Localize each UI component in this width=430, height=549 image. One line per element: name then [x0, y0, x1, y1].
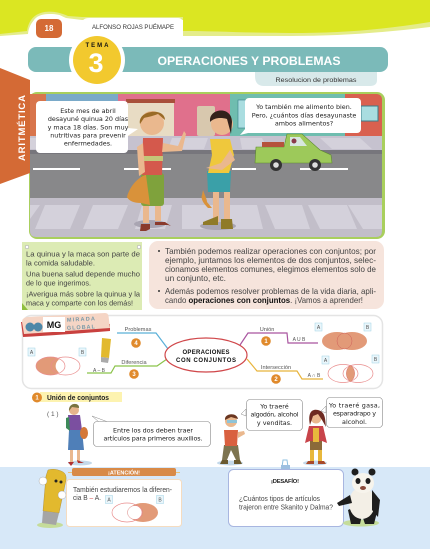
atención banner: ¡ATENCIÓN! [108, 468, 140, 476]
note: healthy food: la comida saludable. [26, 258, 95, 268]
venn: b minus a [106, 496, 164, 522]
pencil mascot small [101, 338, 111, 363]
branch: diferencia: Diferencia [121, 360, 147, 366]
speech bubble: first boy: y maca 18 días. Son muy [48, 124, 129, 132]
title bar: OPERACIONES Y PROBLEMAS [158, 54, 340, 68]
venn: union: B [366, 325, 370, 331]
venn: intersection [322, 355, 379, 382]
panda mascot [337, 468, 380, 526]
venn: b minus a: A [107, 498, 111, 504]
note: healthy food: La quinua y la maca son parte de [26, 250, 140, 258]
speech bubble: first boy: enfermedades. [64, 140, 112, 148]
branch: problemas: Problemas [125, 327, 152, 333]
side tab: aritmética [0, 68, 30, 184]
mirada global label: MIRADA [67, 316, 95, 324]
speech bubble: second boy: ambos alimentos? [275, 120, 333, 128]
speech bubble: girl: esparadrapo y [333, 410, 376, 418]
page number tab [32, 14, 66, 40]
venn: intersection: A [324, 358, 328, 364]
venn: difference: A [30, 350, 34, 356]
panel: mirada global concept map [21, 313, 382, 388]
speech bubble: woman: Entre los dos deben traer [113, 426, 193, 434]
branch: unión: 1 [264, 339, 268, 345]
tema badge: 3 [88, 48, 104, 78]
speech bubble: woman [92, 416, 210, 446]
speech bubble: boy: Yo traeré [259, 402, 289, 410]
branch: intersección: 2 [274, 377, 278, 383]
branch: intersección [261, 365, 321, 384]
speech bubble: first boy: nutritivas para prevenir [50, 132, 126, 140]
speech bubble: boy: y venditas. [257, 419, 292, 427]
branch: diferencia: 3 [132, 372, 136, 378]
branch: unión: Unión [260, 327, 274, 333]
intro text panel: un conjunto, etc. [165, 273, 226, 283]
branch: diferencia: A – B [93, 368, 106, 374]
branch: unión: A U B [293, 337, 306, 343]
callout: desafío: ¡DESAFÍO! [271, 477, 299, 485]
title bar [28, 47, 388, 72]
venn: difference: B [81, 350, 85, 356]
venn: difference [28, 348, 86, 375]
speech bubble: second boy: Pero, ¿cuántos días desayunaste [252, 112, 356, 120]
callout: atención: cia B – A. [73, 493, 101, 502]
speech bubble: first boy [36, 101, 138, 153]
intro text panel: ejemplo, juntamos los elementos de dos conjuntos, selec- [165, 255, 376, 265]
street scene [29, 92, 385, 239]
branch lines [87, 333, 323, 379]
speech bubble: girl [321, 398, 382, 428]
branch: diferencia [93, 360, 147, 379]
note: healthy food [22, 242, 142, 310]
pencil mascot [37, 469, 66, 528]
callout: atención: También estudiaremos la diferen- [73, 485, 172, 494]
boy in yellow shirt [200, 110, 236, 230]
speech bubble: boy [241, 400, 302, 430]
header green wave [0, 0, 430, 36]
central node [165, 338, 247, 372]
intro text panel: También podemos realizar operaciones con conjuntos; por [165, 246, 376, 256]
section heading: unión de conjuntos [32, 392, 122, 402]
pickup truck [255, 134, 332, 171]
woman character [66, 404, 92, 466]
section heading: unión de conjuntos: Unión de conjuntos [47, 395, 109, 402]
intro text panel: cionamos elementos comunes, elegimos elementos solo de [165, 264, 376, 274]
venn: union [315, 323, 371, 350]
boy skanito [217, 414, 245, 466]
note: healthy food: ¡Averigua más sobre la quinua y la [26, 290, 141, 298]
branch: unión [260, 327, 306, 346]
section heading: unión de conjuntos: 1 [35, 396, 39, 402]
speech bubble: second boy [240, 98, 361, 135]
speech bubble: second boy: Yo también me alimento bien. [255, 103, 352, 111]
branch: intersección: Intersección [261, 365, 291, 371]
subtitle tab [255, 72, 377, 86]
branch: problemas [125, 327, 152, 348]
side tab: aritmética: ARITMÉTICA [17, 95, 28, 161]
author tab: ALFONSO ROJAS PUÉMAPE [92, 24, 174, 31]
girl dalma [303, 410, 327, 466]
bottom blue band [0, 467, 430, 549]
venn: b minus a: B [158, 498, 162, 504]
page number tab: 18 [45, 24, 54, 33]
note: healthy food: Una buena salud depende mucho [26, 270, 140, 278]
callout: desafío [228, 460, 344, 526]
speech bubble: woman: artículos para primeros auxilios. [104, 434, 202, 442]
venn: intersection: B [374, 357, 378, 363]
note: healthy food: de lo que ingerimos. [26, 278, 91, 288]
intro text panel: cando operaciones con conjuntos. ¡Vamos a aprender! [165, 295, 363, 305]
speech bubble: boy: algodón, alcohol [250, 410, 299, 418]
central node: OPERACIONES [182, 350, 230, 356]
central node: CON CONJUNTOS [176, 358, 236, 364]
venn: union: A [317, 325, 321, 331]
callout: desafío: ¿Cuántos tipos de artículos [239, 494, 320, 503]
note: healthy food: maca y comparte con los demás! [26, 298, 133, 308]
speech bubble: girl: alcohol. [342, 418, 367, 426]
mirada global label: GLOBAL [67, 324, 96, 332]
mirada global label [21, 313, 110, 337]
speech bubble: first boy: Este mes de abril [60, 107, 116, 115]
problem number: ( 1 ) [47, 411, 59, 418]
branch: problemas: 4 [134, 341, 138, 347]
tema badge: TEMA [86, 43, 109, 49]
boy in red shirt [127, 111, 186, 231]
subtitle tab: Resolucion de problemas [276, 78, 356, 84]
intro text panel: Además podemos resolver problemas de la vida diaria, apli- [165, 286, 376, 296]
author tab [82, 18, 183, 36]
speech bubble: first boy: desayuné quinua 20 días [48, 115, 129, 123]
intro text panel [149, 241, 384, 309]
mirada global label: MG [47, 320, 61, 330]
callout: atención [66, 468, 182, 526]
callout: desafío: trajeron entre Skanito y Dalma? [239, 502, 333, 512]
speech bubble: girl: Yo traeré gasa, [328, 402, 380, 410]
branch: intersección: A ∩ B [308, 373, 321, 379]
tema badge [69, 32, 125, 88]
